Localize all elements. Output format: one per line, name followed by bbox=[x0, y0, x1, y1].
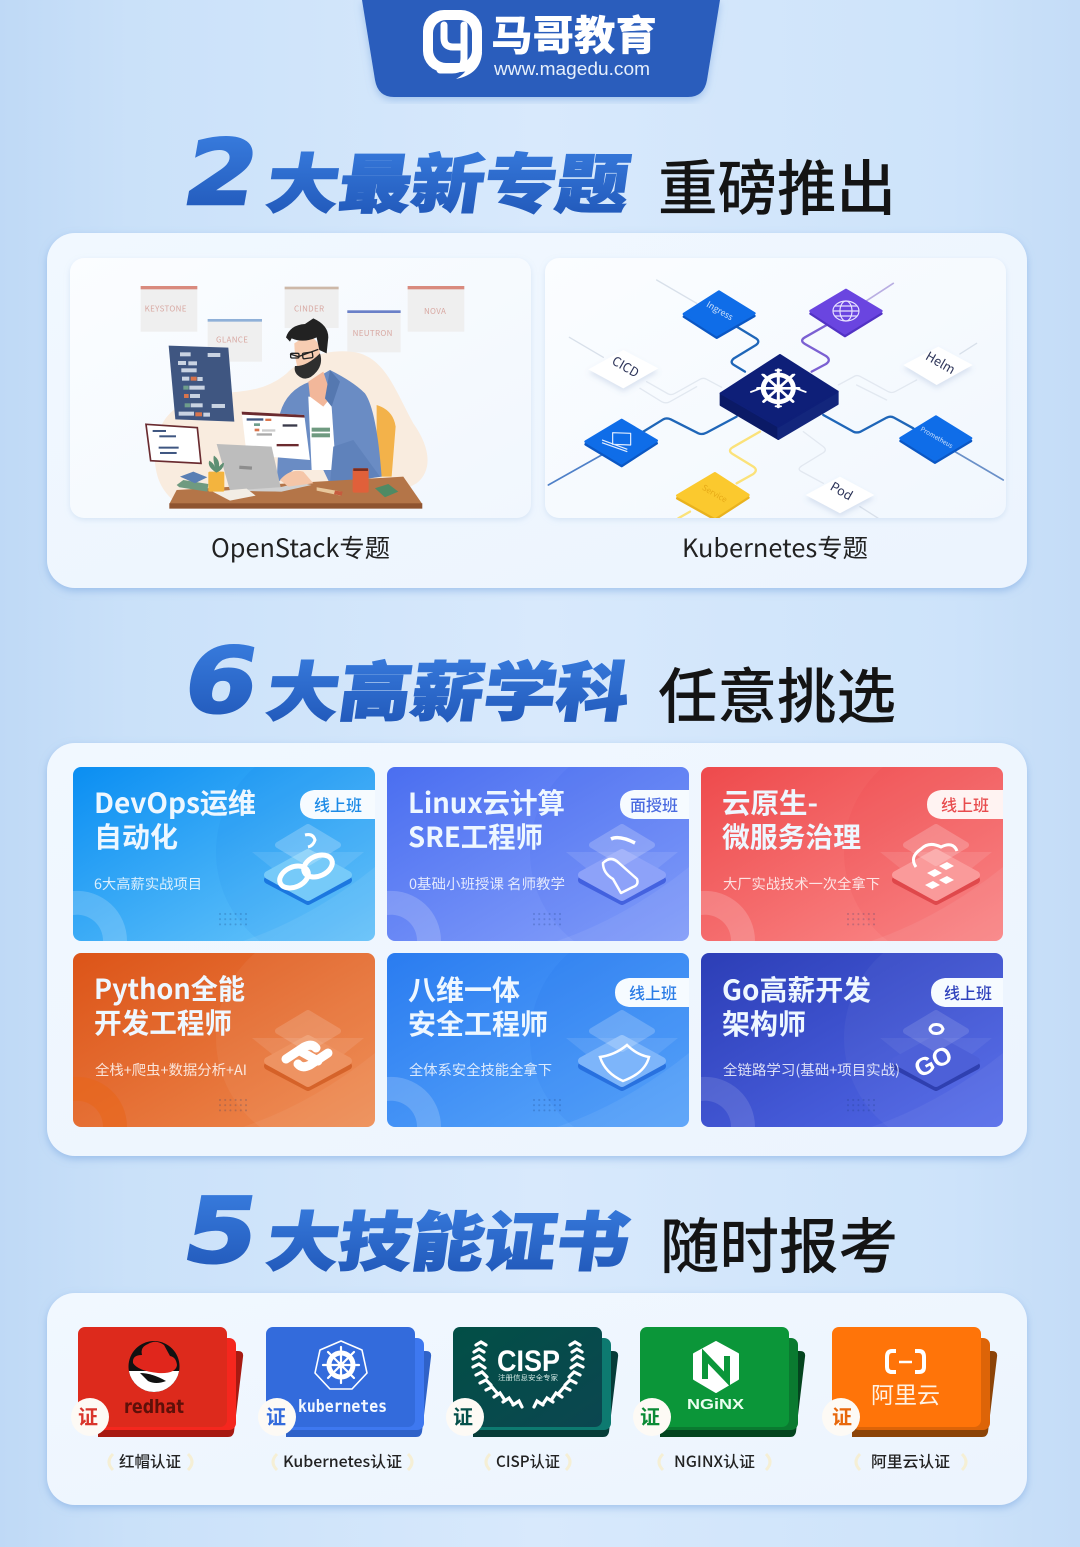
node: network globe bbox=[811, 290, 881, 336]
badge: 证: 证 bbox=[78, 1401, 98, 1430]
illustration: chair bbox=[377, 405, 396, 477]
icon: magedu logo mark bbox=[423, 10, 482, 79]
pill: online class: 线上班 bbox=[314, 792, 362, 816]
badge: 证 bbox=[71, 1398, 109, 1436]
label: Kubernetes认证: Kubernetes认证 bbox=[283, 1450, 402, 1472]
course card: DevOps: 自动化 bbox=[94, 816, 178, 856]
badge: 证 bbox=[633, 1398, 671, 1436]
logo: Aliyun bbox=[871, 1351, 940, 1410]
course card: Go: Go高薪开发 bbox=[722, 969, 871, 1009]
badge: 证: 证 bbox=[453, 1401, 473, 1430]
node: CICD: CICD bbox=[609, 351, 643, 381]
course card: Go bbox=[701, 953, 1003, 1127]
brand name: 马哥教育 bbox=[491, 2, 657, 62]
node: Prometheus: Prometheus bbox=[919, 424, 955, 450]
card: OpenStack illustration bbox=[70, 258, 531, 518]
node: Prometheus bbox=[901, 417, 971, 463]
logo: red hat: redhat bbox=[124, 1396, 184, 1418]
node: Helm bbox=[903, 346, 973, 385]
node: Pod: Pod bbox=[827, 476, 857, 504]
course card: Go: 架构师 bbox=[722, 1003, 806, 1043]
heading: 2大最新专题 重磅推出 bbox=[176, 121, 896, 228]
logo: CISP laurel bbox=[473, 1342, 583, 1407]
icon: shield bbox=[600, 1045, 649, 1081]
badge: 证: 证 bbox=[266, 1401, 286, 1430]
badge: 证 bbox=[258, 1398, 296, 1436]
course card: Cloud native bbox=[701, 767, 1003, 941]
logo banner bbox=[362, 0, 720, 97]
label: CISP认证: CISP认证 bbox=[496, 1450, 560, 1472]
badge: 证 bbox=[822, 1398, 860, 1436]
illustration: background blob bbox=[155, 351, 428, 503]
illustration: man bbox=[277, 318, 382, 484]
certificate: NGINX bbox=[633, 1327, 805, 1437]
card: Kubernetes illustration bbox=[545, 258, 1006, 519]
course card: Security: 八维一体 bbox=[408, 969, 520, 1009]
pill: in-person class: 面授班 bbox=[630, 792, 678, 816]
node: Ingress: Ingress bbox=[704, 298, 735, 323]
icon: python bbox=[286, 1045, 328, 1067]
course card: Linux: Linux云计算 bbox=[408, 782, 565, 822]
pill: online class bbox=[931, 978, 1003, 1007]
heading: 6大高薪学科 任意挑选: 大高薪学科 bbox=[261, 640, 636, 734]
badge: 证: 证 bbox=[640, 1401, 660, 1430]
certificate: CISP bbox=[446, 1327, 618, 1437]
course card: Go: 全链路学习(基础+项目实战) bbox=[723, 1060, 900, 1080]
illustration: floating service windows: CINDER bbox=[294, 303, 324, 314]
illustration: floating service windows bbox=[141, 286, 464, 362]
node: CICD bbox=[590, 357, 657, 392]
certificate: Kubernetes bbox=[258, 1327, 431, 1437]
logo: CISP laurel: CISP bbox=[497, 1345, 560, 1378]
icon: infinity bbox=[276, 835, 336, 892]
node: Service bbox=[677, 473, 748, 519]
panel: six subjects bbox=[47, 740, 1068, 1156]
illustration: centre code window bbox=[242, 412, 310, 460]
logo: Aliyun: 阿里云 bbox=[871, 1376, 940, 1410]
course card: Linux: 0基础小班授课 名师教学 bbox=[409, 874, 565, 894]
course card: Python: 全栈+爬虫+数据分析+AI bbox=[95, 1060, 247, 1080]
heading: 5大技能证书 随时报考: 随时报考 bbox=[660, 1199, 898, 1286]
label: 红帽认证: 红帽认证 bbox=[119, 1450, 181, 1472]
label: 阿里云认证: 阿里云认证 bbox=[871, 1450, 950, 1472]
course card: DevOps: 6大高薪实战项目 bbox=[94, 874, 202, 894]
illustration: floating service windows: KEYSTONE bbox=[145, 304, 187, 315]
pill: online class bbox=[300, 790, 375, 819]
course card: Cloud native: 云原生- bbox=[722, 782, 818, 822]
badge: 证: 证 bbox=[832, 1401, 852, 1430]
course card: DevOps bbox=[73, 767, 375, 941]
badge: 证 bbox=[446, 1398, 484, 1436]
logo: NGINX: NGiNX bbox=[687, 1396, 744, 1413]
label: NGINX认证: NGINX认证 bbox=[674, 1450, 755, 1472]
course card: Security bbox=[387, 953, 689, 1127]
panel: five certificates bbox=[47, 1293, 1027, 1505]
logo: kubernetes: kubernetes bbox=[298, 1397, 387, 1417]
course card: Linux: SRE工程师 bbox=[408, 816, 543, 856]
pill: in-person class bbox=[620, 790, 689, 819]
panel: two new topics bbox=[47, 233, 1027, 588]
heading: 6大高薪学科 任意挑选: 6 bbox=[176, 629, 267, 734]
pill: online class bbox=[615, 978, 689, 1007]
heading: 5大技能证书 随时报考: 5 bbox=[176, 1179, 267, 1284]
node: central Kubernetes block bbox=[721, 355, 838, 439]
pill: online class: 线上班 bbox=[629, 980, 677, 1004]
certificate: Alibaba Cloud bbox=[822, 1327, 997, 1437]
heading: 2大最新专题 重磅推出: 重磅推出 bbox=[658, 141, 896, 228]
course card: Python: 开发工程师 bbox=[94, 1002, 232, 1042]
course card: DevOps: DevOps运维 bbox=[94, 782, 256, 822]
heading: 5大技能证书 随时报考 bbox=[176, 1179, 898, 1286]
brand url: www.magedu.com bbox=[493, 59, 650, 79]
label: Kubernetes topic: Kubernetes专题 bbox=[682, 529, 868, 565]
illustration: floating service windows: GLANCE bbox=[216, 335, 248, 346]
heading: 6大高薪学科 任意挑选: 任意挑选 bbox=[658, 649, 896, 736]
logo: NGINX bbox=[687, 1342, 744, 1413]
heading: 2大最新专题 重磅推出: 2 bbox=[176, 121, 267, 226]
heading: 6大高薪学科 任意挑选 bbox=[176, 629, 896, 736]
course card: Python: Python全能 bbox=[94, 968, 245, 1008]
label: OpenStack topic: OpenStack专题 bbox=[211, 529, 390, 565]
node: Helm: Helm bbox=[923, 346, 959, 378]
illustration: floating service windows: NOVA bbox=[424, 306, 446, 317]
course card: Cloud native: 微服务治理 bbox=[722, 816, 861, 856]
course card: Python bbox=[73, 953, 375, 1127]
certificate: Red Hat bbox=[71, 1327, 243, 1437]
heading: 2大最新专题 重磅推出: 大最新专题 bbox=[261, 132, 636, 226]
illustration: desk with items bbox=[169, 444, 422, 509]
icon: GO wordmark: GO bbox=[910, 1040, 957, 1083]
course card: Linux bbox=[387, 767, 689, 941]
illustration: floating service windows: NEUTRON bbox=[353, 328, 393, 339]
icon: penguin bbox=[603, 838, 638, 893]
node: Ingress bbox=[684, 292, 754, 338]
course card: Security: 全体系安全技能全拿下 bbox=[409, 1060, 552, 1080]
heading: 5大技能证书 随时报考: 大技能证书 bbox=[261, 1190, 636, 1284]
connector lines bbox=[548, 280, 1003, 518]
node: Service: Service bbox=[700, 482, 730, 506]
pill: online class: 线上班 bbox=[941, 792, 989, 816]
course card: Security: 安全工程师 bbox=[408, 1003, 548, 1043]
logo: red hat bbox=[124, 1341, 184, 1418]
logo: CISP laurel: 注册信息安全专家 bbox=[498, 1373, 558, 1383]
pill: online class: 线上班 bbox=[944, 980, 992, 1004]
illustration: code panel bbox=[146, 346, 234, 463]
course card: Cloud native: 大厂实战技术一次全拿下 bbox=[723, 874, 880, 894]
pill: online class bbox=[927, 790, 1003, 819]
logo: kubernetes bbox=[298, 1341, 387, 1417]
node: Pod bbox=[806, 476, 874, 513]
icon: cloud microservices bbox=[913, 844, 957, 889]
node: laptop bbox=[586, 420, 657, 466]
